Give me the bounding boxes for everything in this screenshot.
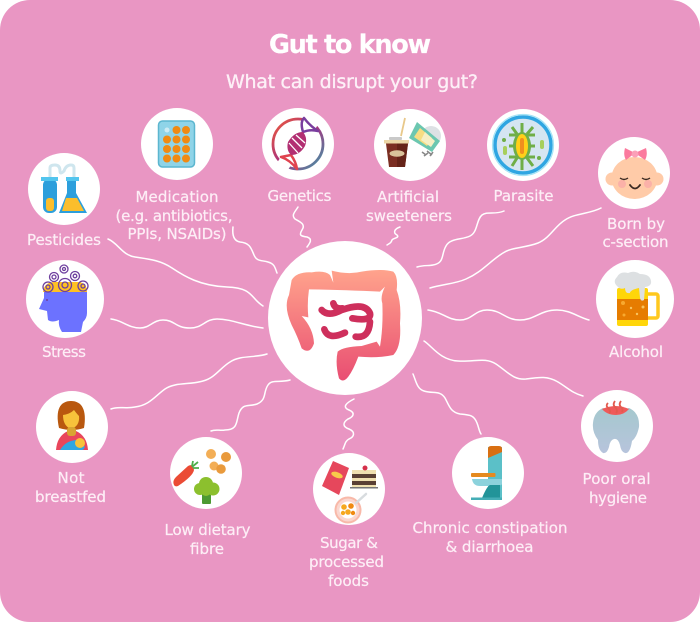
item: genetics [262, 108, 334, 205]
item: parasite [487, 109, 559, 205]
label: Poor oral [582, 470, 650, 488]
label: Sugar & [320, 534, 378, 552]
item: artificial sweeteners: sweeteners [366, 207, 452, 225]
arrow: not breastfed [111, 354, 267, 409]
label: Artificial [377, 188, 439, 206]
item: low dietary fibre: fibre [190, 540, 224, 558]
icon: coffee cup and sweetener packet [384, 118, 441, 167]
label: Born by [607, 215, 665, 233]
item: sugar and processed foods: foods [328, 572, 369, 590]
arrow: genetics [293, 207, 310, 247]
item: low dietary fibre [164, 437, 251, 558]
icon: decayed tooth [593, 401, 639, 453]
central gut illustration [268, 241, 422, 395]
label: Chronic constipation [412, 519, 568, 537]
item: artificial sweeteners [366, 109, 452, 225]
icon: dna helix [273, 116, 323, 170]
icon: head with swirling thoughts [39, 265, 88, 332]
item: pesticides [27, 153, 101, 249]
arrow: stress [111, 319, 263, 328]
item: medication: (e.g. antibiotics, [116, 207, 232, 225]
icon: toilet [471, 446, 502, 500]
label: Alcohol [609, 343, 663, 361]
icon: cereal box, cake, bowl [322, 461, 378, 522]
arrow: chronic constipation [413, 374, 481, 434]
item: born by c-section [598, 137, 670, 251]
arrow: born by c-section [430, 208, 601, 288]
label: Medication [136, 188, 218, 206]
arrow: pesticides [108, 239, 263, 306]
item: born by c-section: c-section [602, 233, 668, 251]
arrow: parasite [417, 211, 504, 267]
label: Pesticides [27, 231, 101, 249]
label: Stress [42, 343, 86, 361]
item: alcohol [596, 260, 674, 361]
icon: carrot, chickpeas, broccoli [173, 449, 231, 504]
item: not breastfed [35, 391, 108, 506]
icon: blister pack [158, 121, 194, 167]
icon: parasite in petri dish [492, 114, 554, 176]
arrow: artificial sweeteners [387, 227, 400, 245]
icon: beer mug [615, 272, 658, 326]
item: sugar and processed foods: processed [309, 553, 384, 571]
subtitle: What can disrupt your gut? [226, 71, 478, 93]
label: Genetics [268, 187, 332, 205]
icon: baby face [606, 148, 664, 199]
item: not breastfed: breastfed [35, 488, 106, 506]
arrow: alcohol [428, 310, 589, 320]
arrow: sugar and processed foods [343, 399, 354, 449]
arrow: poor oral hygiene [424, 341, 583, 396]
label: Not [58, 469, 85, 487]
icon: test tube and flask [41, 165, 87, 213]
item: medication: PPIs, NSAIDs) [128, 225, 226, 243]
arrow: low dietary fibre [211, 380, 290, 431]
label: Parasite [494, 187, 554, 205]
item: chronic constipation and diarrhoea: & diarrhoea [446, 538, 534, 556]
item: stress [26, 260, 104, 361]
title: Gut to know [269, 30, 431, 60]
arrow: medication [233, 227, 277, 273]
icon: mother and baby [56, 401, 88, 450]
label: Low dietary [164, 521, 251, 539]
item: chronic constipation and diarrhoea [412, 437, 568, 556]
item: sugar and processed foods [309, 453, 385, 590]
item: poor oral hygiene: hygiene [589, 489, 647, 507]
item: poor oral hygiene [581, 390, 653, 507]
item: medication [116, 108, 232, 243]
